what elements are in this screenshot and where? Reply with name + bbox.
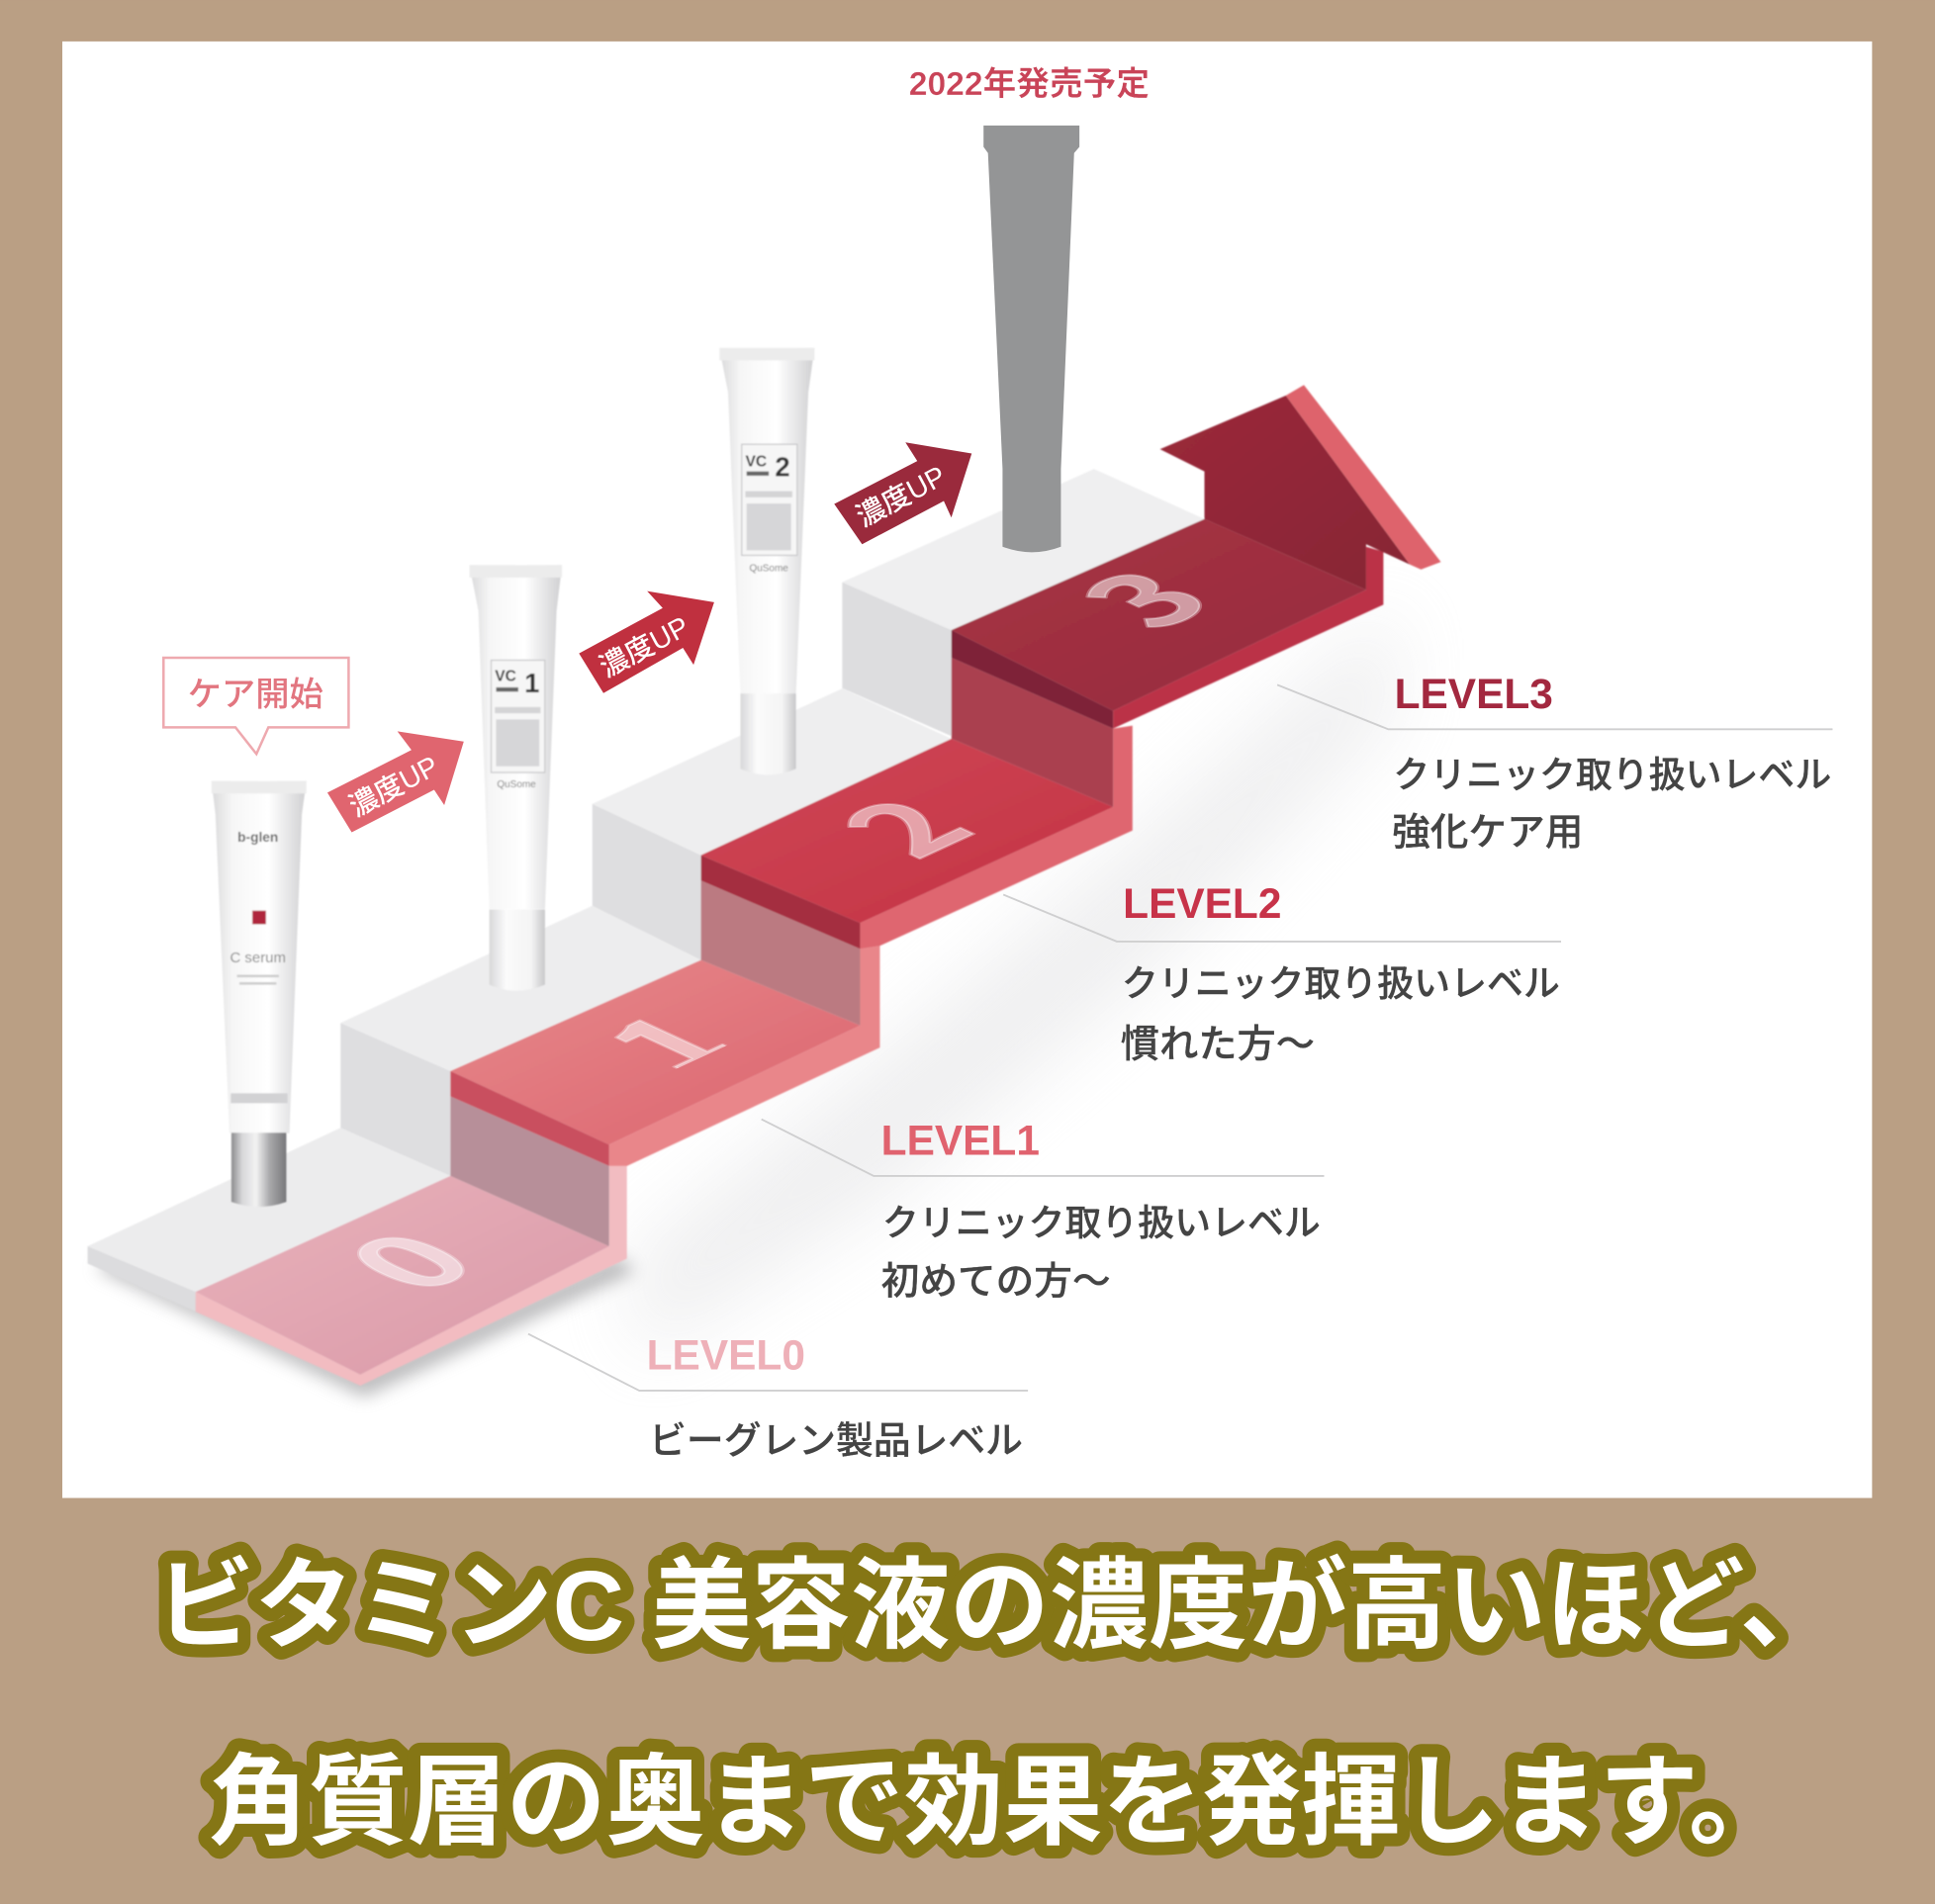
tube label title: VC <box>745 454 767 471</box>
level 2 heading: LEVEL2 <box>1123 880 1281 927</box>
arrow: concentration up 3 <box>834 442 971 544</box>
number 0: 0 <box>294 1208 514 1310</box>
product tube: level 1 <box>470 565 562 991</box>
tube label number: 2 <box>775 452 790 483</box>
step 3 <box>952 519 1383 729</box>
number 2: 2 <box>789 773 1011 875</box>
tube brand: b-glen <box>237 830 278 845</box>
big red arrow head <box>1160 385 1441 589</box>
level 1 heading: LEVEL1 <box>881 1118 1040 1164</box>
level 3 description: クリニック取り扱いレベル <box>1393 755 1831 795</box>
platform shadow <box>96 1256 635 1397</box>
level 1 block <box>762 1118 1325 1304</box>
tube label number: 1 <box>524 668 539 698</box>
staircase <box>88 385 1441 1386</box>
step numbers <box>294 545 1250 1310</box>
callout: care start <box>163 658 348 754</box>
arrow text: 濃度UP <box>344 751 444 824</box>
white panel <box>62 42 1872 1497</box>
level 0 heading: LEVEL0 <box>647 1332 805 1379</box>
level 1 description: クリニック取り扱いレベル <box>882 1203 1321 1243</box>
level 2 description: クリニック取り扱いレベル <box>1122 963 1560 1004</box>
headline line 2: 角質層の奥まで効果を発揮します。 <box>209 1747 1788 1858</box>
level 0 block <box>528 1332 1028 1463</box>
level 1 audience: 初めての方～ <box>881 1261 1111 1304</box>
release label: 2022年発売予定 <box>909 65 1150 103</box>
step 2 <box>701 658 1133 949</box>
tube label title: VC <box>495 669 516 685</box>
number 3: 3 <box>1029 545 1250 647</box>
level 3 heading: LEVEL3 <box>1395 671 1553 717</box>
product tube: upcoming level 3 <box>983 126 1079 552</box>
arrow text: 濃度UP <box>852 460 952 533</box>
tube maker: QuSome <box>749 564 788 575</box>
step 1 <box>450 880 879 1166</box>
red square mark <box>252 911 266 924</box>
level 0 description: ビーグレン製品レベル <box>649 1421 1023 1463</box>
arrow: concentration up 1 <box>327 731 464 832</box>
product tube: level 0 <box>212 781 307 1207</box>
level 3 block <box>1277 671 1832 855</box>
tube maker: QuSome <box>497 779 536 790</box>
callout text: ケア開始 <box>188 677 323 714</box>
headline line 1: ビタミンC 美容液の濃度が高いほど、 <box>155 1551 1839 1662</box>
white steps <box>88 469 1205 1312</box>
arrow text: 濃度UP <box>595 611 694 684</box>
level 3 audience: 強化ケア用 <box>1392 812 1583 855</box>
level 2 audience: 慣れた方～ <box>1121 1023 1315 1066</box>
number 1: 1 <box>553 989 774 1091</box>
floor shadow <box>629 604 1395 1357</box>
arrow: concentration up 2 <box>579 591 714 693</box>
level 2 block <box>1003 880 1561 1066</box>
product tube: level 2 <box>719 348 814 774</box>
tube product name: C serum <box>230 950 286 966</box>
step 0 <box>196 1096 627 1386</box>
